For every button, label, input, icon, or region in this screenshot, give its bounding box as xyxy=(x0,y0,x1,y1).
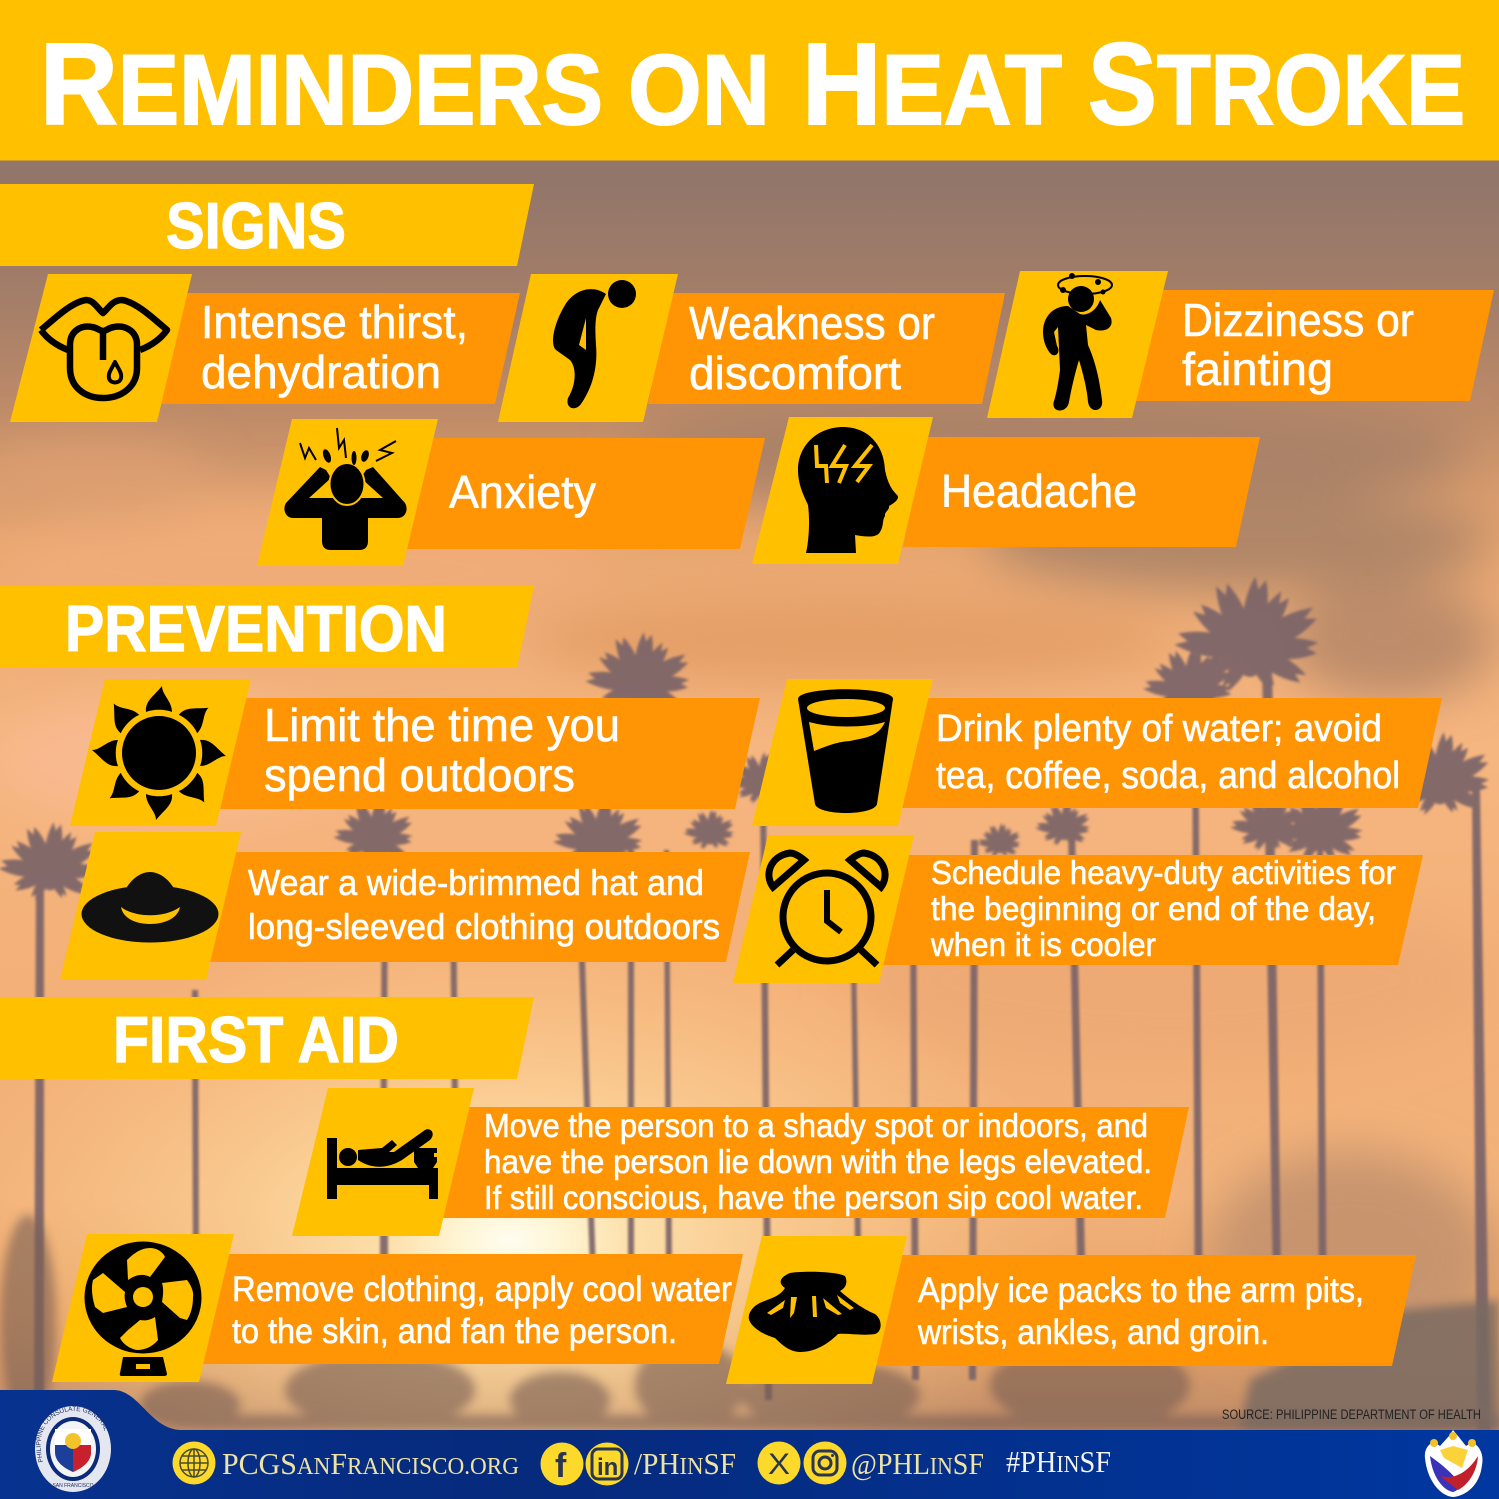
background: grey trees at right xyxy=(1240,1300,1499,1430)
label xyxy=(264,699,620,801)
title banner xyxy=(0,0,1499,160)
icon: sun xyxy=(92,686,226,820)
label: Remove clothing, apply cool water xyxy=(232,1270,732,1309)
label: the beginning or end of the day, xyxy=(931,890,1376,927)
card: anxiety xyxy=(257,419,765,566)
label: have the person lie down with the legs elevated. xyxy=(484,1143,1152,1180)
icon: head with bolts xyxy=(798,427,898,553)
icon: x: X xyxy=(768,1448,790,1481)
label xyxy=(232,1270,732,1351)
icon: instagram xyxy=(804,1442,846,1484)
label: long-sleeved clothing outdoors xyxy=(248,906,720,947)
label xyxy=(930,854,1396,963)
seal: consulate general xyxy=(35,1406,111,1492)
url: PCGSANFRANCISCO.ORG xyxy=(222,1446,519,1481)
icon: dizzy person xyxy=(1043,273,1112,411)
label: Drink plenty of water; avoid xyxy=(936,708,1382,750)
label xyxy=(201,296,468,398)
label: Limit the time you xyxy=(264,699,620,751)
label: fainting xyxy=(1182,343,1333,395)
card: limit outdoor time xyxy=(70,679,760,826)
logo: philippine emblem xyxy=(1425,1430,1483,1497)
title: HEAT xyxy=(802,19,1062,149)
heading: prevention: PREVENTION xyxy=(65,592,447,665)
background: dark tree line xyxy=(0,1215,1499,1430)
label xyxy=(1182,294,1414,395)
section: prevention xyxy=(0,586,1442,983)
footer band xyxy=(0,1390,1499,1499)
title: REMINDERS xyxy=(40,19,603,149)
icon: weak bent figure xyxy=(553,280,636,408)
icon: glass of water xyxy=(798,689,893,813)
background: palm tree silhouettes xyxy=(0,576,1491,1430)
label: Schedule heavy-duty activities for xyxy=(931,854,1396,891)
icon: linkedin xyxy=(586,1442,628,1486)
label xyxy=(917,1271,1364,1352)
label: discomfort xyxy=(689,347,901,399)
card: schedule activities xyxy=(733,835,1423,983)
title xyxy=(40,19,1465,149)
label: Anxiety xyxy=(449,466,596,518)
card: dizziness xyxy=(987,271,1494,418)
label xyxy=(248,862,720,947)
icon: electric fan xyxy=(84,1242,202,1376)
heading: signs xyxy=(0,184,534,266)
icon: facebook xyxy=(540,1442,584,1486)
label: wrists, ankles, and groin. xyxy=(917,1313,1269,1352)
label xyxy=(936,708,1400,797)
icon: person on bed with raised legs xyxy=(327,1129,438,1199)
icon: tongue with drop xyxy=(41,300,167,398)
card: drink water xyxy=(752,679,1442,826)
title: STROKE xyxy=(1088,19,1465,149)
label: dehydration xyxy=(201,346,441,398)
heading: first aid: FIRST AID xyxy=(113,1003,399,1076)
x and instagram xyxy=(758,1442,984,1484)
handle: @PHLINSF xyxy=(851,1446,984,1481)
facebook and linkedin xyxy=(540,1442,736,1486)
card: weakness xyxy=(498,274,1005,422)
label: If still conscious, have the person sip cool water. xyxy=(484,1179,1143,1216)
section: signs xyxy=(0,184,1494,566)
heading: signs: SIGNS xyxy=(166,189,346,262)
card: move to shade xyxy=(292,1088,1189,1236)
icon: wide-brimmed hat xyxy=(82,872,218,942)
section: first aid xyxy=(0,997,1416,1384)
icon: linkedin: in xyxy=(597,1454,618,1481)
seal: consulate general: PHILIPPINE CONSULATE GENERAL xyxy=(36,1406,108,1462)
icon: facebook: f xyxy=(555,1447,567,1485)
icon: alarm clock xyxy=(769,853,885,965)
icon: anxious person xyxy=(284,428,407,550)
icon: ice pack xyxy=(749,1272,881,1352)
label: spend outdoors xyxy=(264,749,575,801)
handle: /PHINSF xyxy=(634,1446,736,1481)
label: Wear a wide-brimmed hat and xyxy=(248,862,704,903)
hashtag: #PHINSF xyxy=(1006,1444,1111,1479)
icon: x xyxy=(758,1442,800,1484)
label: to the skin, and fan the person. xyxy=(232,1312,677,1351)
label: Dizziness or xyxy=(1182,294,1414,346)
label: Move the person to a shady spot or indoors, and xyxy=(484,1107,1148,1144)
label: Weakness or xyxy=(689,297,935,349)
card: hat and sleeves xyxy=(60,832,750,980)
card: headache xyxy=(752,417,1260,564)
seal: consulate general: SAN FRANCISCO xyxy=(52,1483,94,1489)
label xyxy=(689,297,935,399)
card: remove clothing xyxy=(52,1234,743,1382)
heading: first aid xyxy=(0,997,534,1079)
label: tea, coffee, soda, and alcohol xyxy=(936,755,1400,797)
card: intense thirst xyxy=(10,274,520,422)
label: Headache xyxy=(941,465,1137,517)
card: ice packs xyxy=(726,1236,1416,1384)
label: Intense thirst, xyxy=(201,296,468,348)
icon: globe xyxy=(172,1442,216,1484)
label: when it is cooler xyxy=(930,926,1156,963)
website xyxy=(172,1442,519,1484)
title: ON xyxy=(628,34,770,145)
label xyxy=(484,1107,1152,1216)
label: Apply ice packs to the arm pits, xyxy=(918,1271,1364,1310)
